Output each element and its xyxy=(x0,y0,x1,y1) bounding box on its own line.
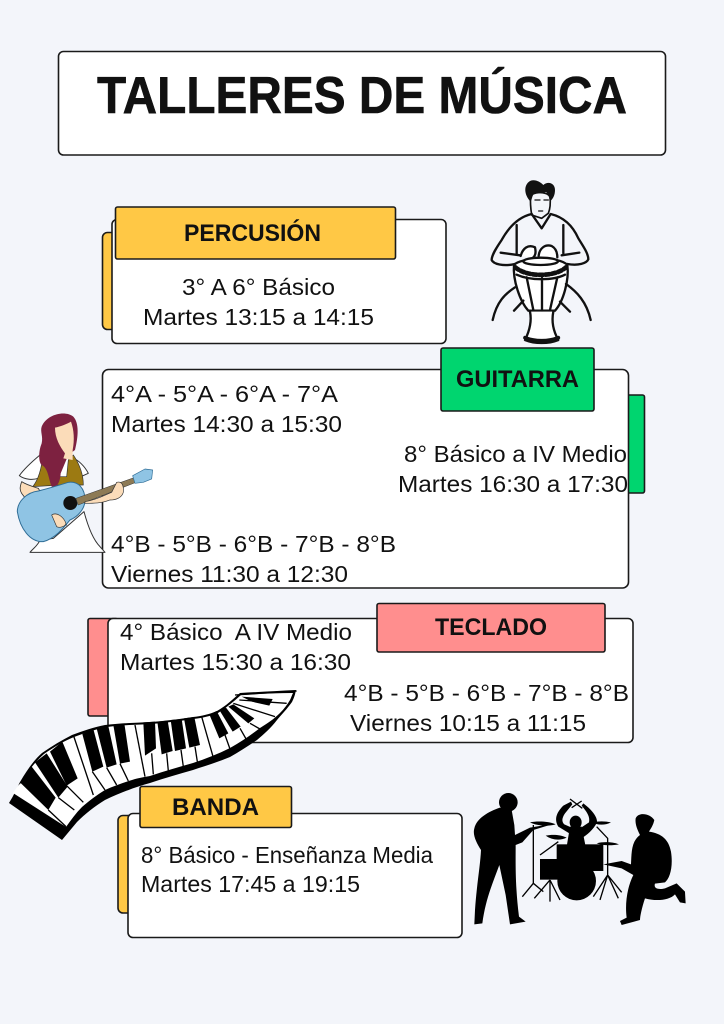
text: banda schedule: Martes 17:45 a 19:15 xyxy=(141,871,360,897)
heading: percusión xyxy=(116,207,396,259)
heading: percusión: PERCUSIÓN xyxy=(184,219,321,247)
text: percusión schedule xyxy=(143,274,374,330)
heading: teclado xyxy=(377,604,605,652)
heading: guitarra xyxy=(441,348,594,411)
text: guitarra group 3: Viernes 11:30 a 12:30 xyxy=(111,561,348,587)
text: guitarra group 3: 4°B - 5°B - 6°B - 7°B - 8°B xyxy=(111,531,396,557)
guitarist right xyxy=(603,814,686,925)
black keys, right half xyxy=(143,691,297,756)
text: guitarra group 2 xyxy=(398,441,628,497)
text: guitarra group 1 xyxy=(111,381,342,437)
text: teclado group 1: Martes 15:30 a 16:30 xyxy=(120,649,351,675)
title: TALLERES DE MÚSICA xyxy=(97,67,627,125)
white key dividers, left half xyxy=(48,725,145,827)
panel: guitarra xyxy=(102,348,644,588)
text: guitarra group 3 xyxy=(111,531,396,587)
heading: banda xyxy=(140,786,292,828)
text: teclado group 2 xyxy=(344,680,629,736)
icon: girl with guitar xyxy=(17,414,153,552)
white key dividers, right half xyxy=(152,700,287,774)
heading: guitarra: GUITARRA xyxy=(456,366,579,393)
title xyxy=(58,52,666,155)
guitarist left xyxy=(474,793,555,924)
icon: wavy piano keyboard xyxy=(9,690,297,840)
panel: percusión xyxy=(102,207,446,344)
text: banda schedule xyxy=(141,842,433,897)
text: teclado group 1: 4° Básico A IV Medio xyxy=(120,619,352,645)
panel: teclado xyxy=(88,604,633,742)
icon: drummer with djembe xyxy=(492,180,591,343)
text: teclado group 1 xyxy=(120,619,352,675)
panel: banda xyxy=(118,786,462,938)
text: guitarra group 1: Martes 14:30 a 15:30 xyxy=(111,411,342,437)
drummer and drum kit xyxy=(522,799,622,902)
text: banda schedule: 8° Básico - Enseñanza Media xyxy=(141,842,433,868)
text: guitarra group 2: Martes 16:30 a 17:30 xyxy=(398,471,628,497)
text: guitarra group 2: 8° Básico a IV Medio xyxy=(404,441,627,467)
text: percusión schedule: Martes 13:15 a 14:15 xyxy=(143,304,374,330)
black keys, left half xyxy=(20,723,130,810)
text: percusión schedule: 3° A 6° Básico xyxy=(182,274,335,300)
text: guitarra group 1: 4°A - 5°A - 6°A - 7°A xyxy=(111,381,339,407)
heading: banda: BANDA xyxy=(172,794,259,821)
heading: teclado: TECLADO xyxy=(435,614,547,641)
text: teclado group 2: 4°B - 5°B - 6°B - 7°B - 8°B xyxy=(344,680,629,706)
text: teclado group 2: Viernes 10:15 a 11:15 xyxy=(350,710,586,736)
icon: rock band silhouette xyxy=(474,793,686,925)
